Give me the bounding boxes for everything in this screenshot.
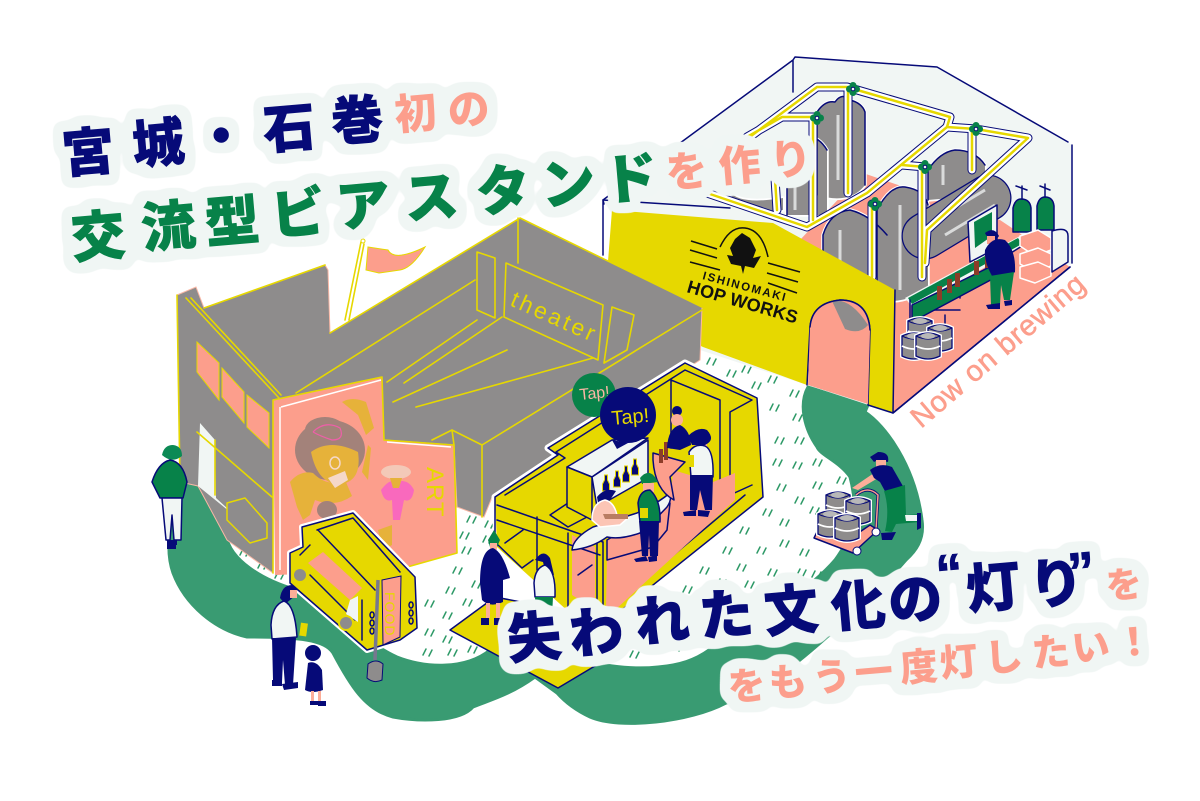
hop works logo [685,228,800,327]
worker with keg trolley [814,452,921,555]
brewery floor [800,173,1070,413]
closing line 2: をもう一度灯したい！ [726,621,1155,710]
stand floor [606,470,735,610]
art label: ART [421,467,448,518]
sign pole [375,580,378,660]
monitor [968,205,997,262]
tap speech bubbles: Tap! [611,405,650,430]
hop works logo: HOP WORKS [685,277,800,327]
worker figure [852,452,921,540]
beer tanks [730,96,985,301]
customer white shirt [683,429,713,517]
headline line 2: を作り [664,134,814,197]
brewery building [603,57,1092,434]
mural dancer [378,465,414,550]
bar counter [572,493,671,560]
hop works logo: ISHINOMAKI [701,270,788,304]
headline line 1: 宮城・石巻 [60,91,386,185]
theater building [177,218,702,575]
brewery roof outline [603,57,1072,263]
entrance step [227,498,267,543]
headline line 1: 初の [393,84,492,139]
stacked trays [1052,229,1068,272]
theater windows [197,342,269,448]
side door recess [198,423,240,520]
food truck [290,513,417,682]
pipes [707,82,1028,277]
headline line 2: 交流型ビアスタンド [69,147,660,270]
customer green hat [634,473,660,562]
person back view [152,445,187,549]
grass tufts [228,358,846,658]
bartender seated [592,490,628,527]
trolley kegs [818,492,870,541]
stand body [495,363,763,617]
man white shirt [534,553,555,617]
bottling table [905,236,1026,330]
adult with beer [271,585,308,690]
theater screen label: theater [507,286,602,347]
tap unit [567,438,648,520]
step [550,503,587,527]
kegs [902,318,952,359]
tap speech bubbles [572,373,656,449]
tap speech bubbles: Tap! [579,384,611,404]
child [305,645,326,706]
taps [602,459,638,491]
arch interior [808,300,870,404]
truck lights [370,602,413,634]
headline text [60,84,1155,710]
theater lines [177,218,702,517]
brewer [985,230,1015,309]
truck window [346,596,358,622]
tank outlines [787,96,985,300]
art wall [273,377,457,575]
green path: right lobe [535,387,923,723]
back counter [653,442,685,500]
trolley [814,490,880,555]
beer stand [450,363,763,688]
front opening [572,535,595,610]
horizontal tank [925,198,988,236]
woman navy dress [480,530,510,625]
brewery front wall [605,210,895,413]
barista [667,406,691,450]
truck wheels [293,568,353,630]
closing line 1: を [1104,563,1144,607]
food truck: FOOD [382,592,398,636]
green path: left lobe [169,467,535,720]
stand front plate [450,597,615,688]
closing line 1: 失われた文化の“灯り” [505,541,1097,671]
flag [345,239,425,320]
cardboard boxes [1020,230,1051,283]
theater roof mass [177,218,702,573]
gas cylinders [1013,184,1054,232]
front shelves [497,505,603,613]
now on brewing label: Now on brewing [905,268,1092,434]
truck back panel [382,576,401,645]
truck awning [308,552,362,600]
mural portrait [290,399,374,520]
brewery back wall [603,57,1072,413]
